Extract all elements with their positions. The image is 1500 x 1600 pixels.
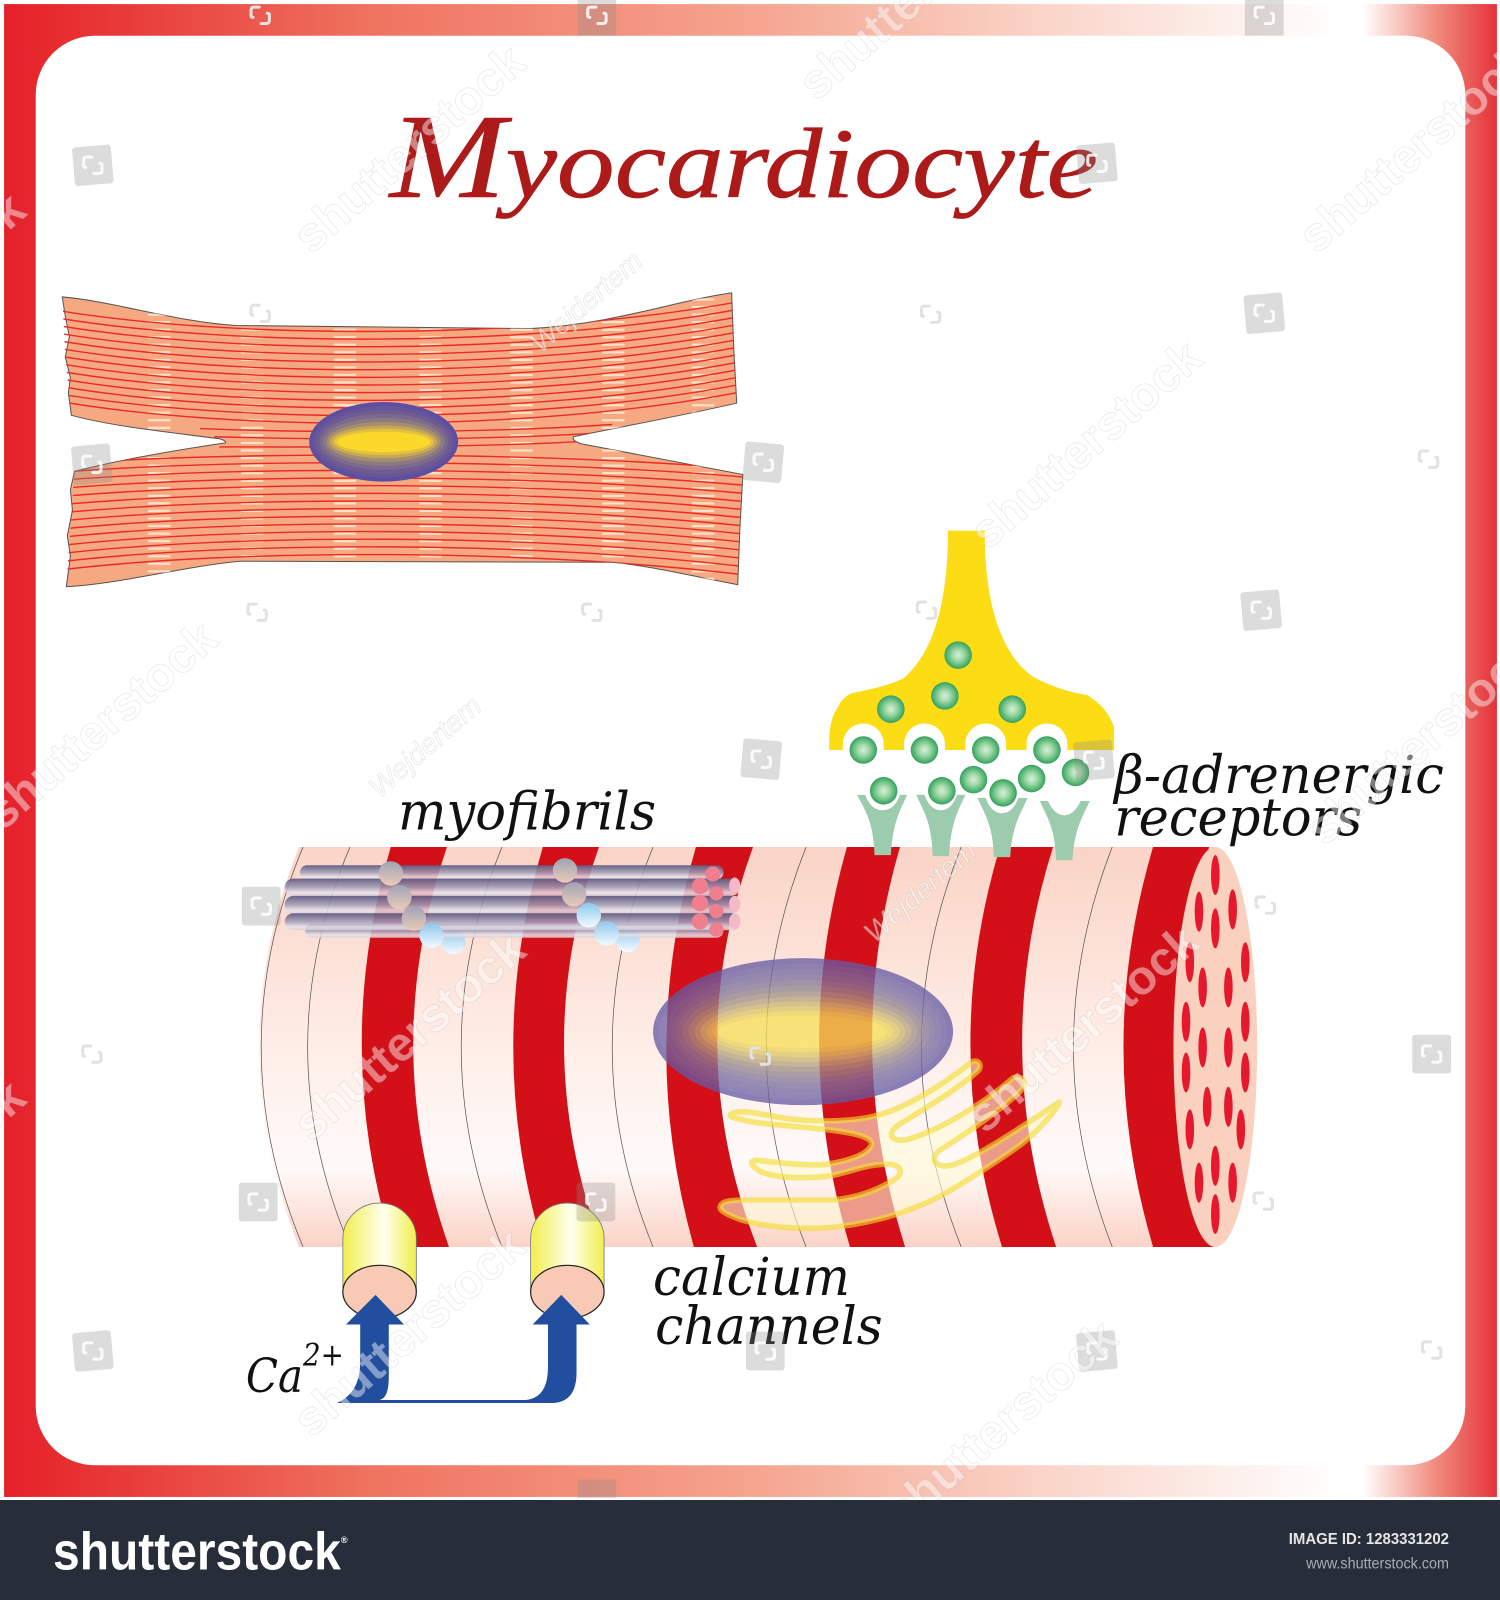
illustration: nerve terminal: [829, 531, 1114, 750]
watermark: standalone marks: [83, 7, 1441, 1358]
calcium channel 1: [343, 1203, 416, 1318]
footer url: www.shutterstock.com: [1305, 1555, 1449, 1572]
receptors: [857, 795, 1090, 860]
label: beta-adrenergic receptors: β-adrenergic: [1112, 746, 1444, 806]
cylinder segment lines: [261, 847, 1112, 1247]
watermark: contributor name: Wejdertem: [363, 690, 488, 804]
footer logo: shutterstock: [53, 1522, 341, 1581]
footer image id: IMAGE ID: 1283331202: [1289, 1531, 1449, 1548]
watermark: stock text: shutterstock: [284, 34, 536, 263]
footer logo: ®: [341, 1535, 348, 1545]
watermark: stock text: shutterstock: [284, 1218, 536, 1447]
label: beta-adrenergic receptors: [1112, 746, 1444, 849]
watermark: stock text: shutterstock: [284, 922, 536, 1151]
watermark: stock text: shutterstock: [960, 330, 1212, 559]
label: calcium channels: calcium: [653, 1248, 850, 1308]
label: beta-adrenergic receptors: receptors: [1114, 789, 1362, 849]
cell striations: [56, 291, 750, 592]
watermark: contributor name: Wejdertem: [858, 835, 983, 949]
endoplasmic reticulum: [720, 1061, 1059, 1228]
neurotransmitter vesicles: [849, 641, 1089, 807]
watermark: marks inside tiles: [83, 7, 1441, 1359]
illustration: cylinder section of myocyte: [259, 847, 1257, 1247]
watermark: stock text: shutterstock: [876, 1310, 1128, 1539]
large nucleus: [653, 958, 953, 1105]
watermark: contributor name: Wejdertem: [524, 245, 649, 359]
illustration: whole cardiomyocyte cell: [56, 291, 750, 592]
cell body: [62, 293, 743, 587]
t-tubule vesicles: [379, 858, 619, 948]
cylinder body: [259, 847, 1214, 1247]
cylinder end face: [1173, 847, 1257, 1247]
end face holes: [1182, 855, 1250, 1234]
t-tubule vesicles behind fibrils: [441, 928, 640, 954]
label: Ca2+: 2+: [302, 1338, 344, 1373]
label: Ca2+: [246, 1338, 344, 1404]
title: Myocardiocyte: [387, 91, 1098, 224]
calcium channel 2: [531, 1203, 604, 1318]
arrow: calcium flow: [337, 1295, 590, 1403]
release pockets: [843, 723, 1067, 751]
myofibrils bundle: [285, 865, 740, 938]
red bands: [362, 847, 1214, 1247]
label: calcium channels: channels: [655, 1297, 883, 1357]
watermark: stock text: shutterstock: [957, 914, 1209, 1143]
small nucleus: [309, 402, 458, 482]
label: myofibrils: myofibrils: [398, 783, 656, 843]
label: calcium channels: [653, 1248, 883, 1357]
footer bar: [0, 1500, 1500, 1600]
watermark: contributor name: [363, 245, 983, 949]
label: Ca2+: Ca: [246, 1349, 303, 1404]
